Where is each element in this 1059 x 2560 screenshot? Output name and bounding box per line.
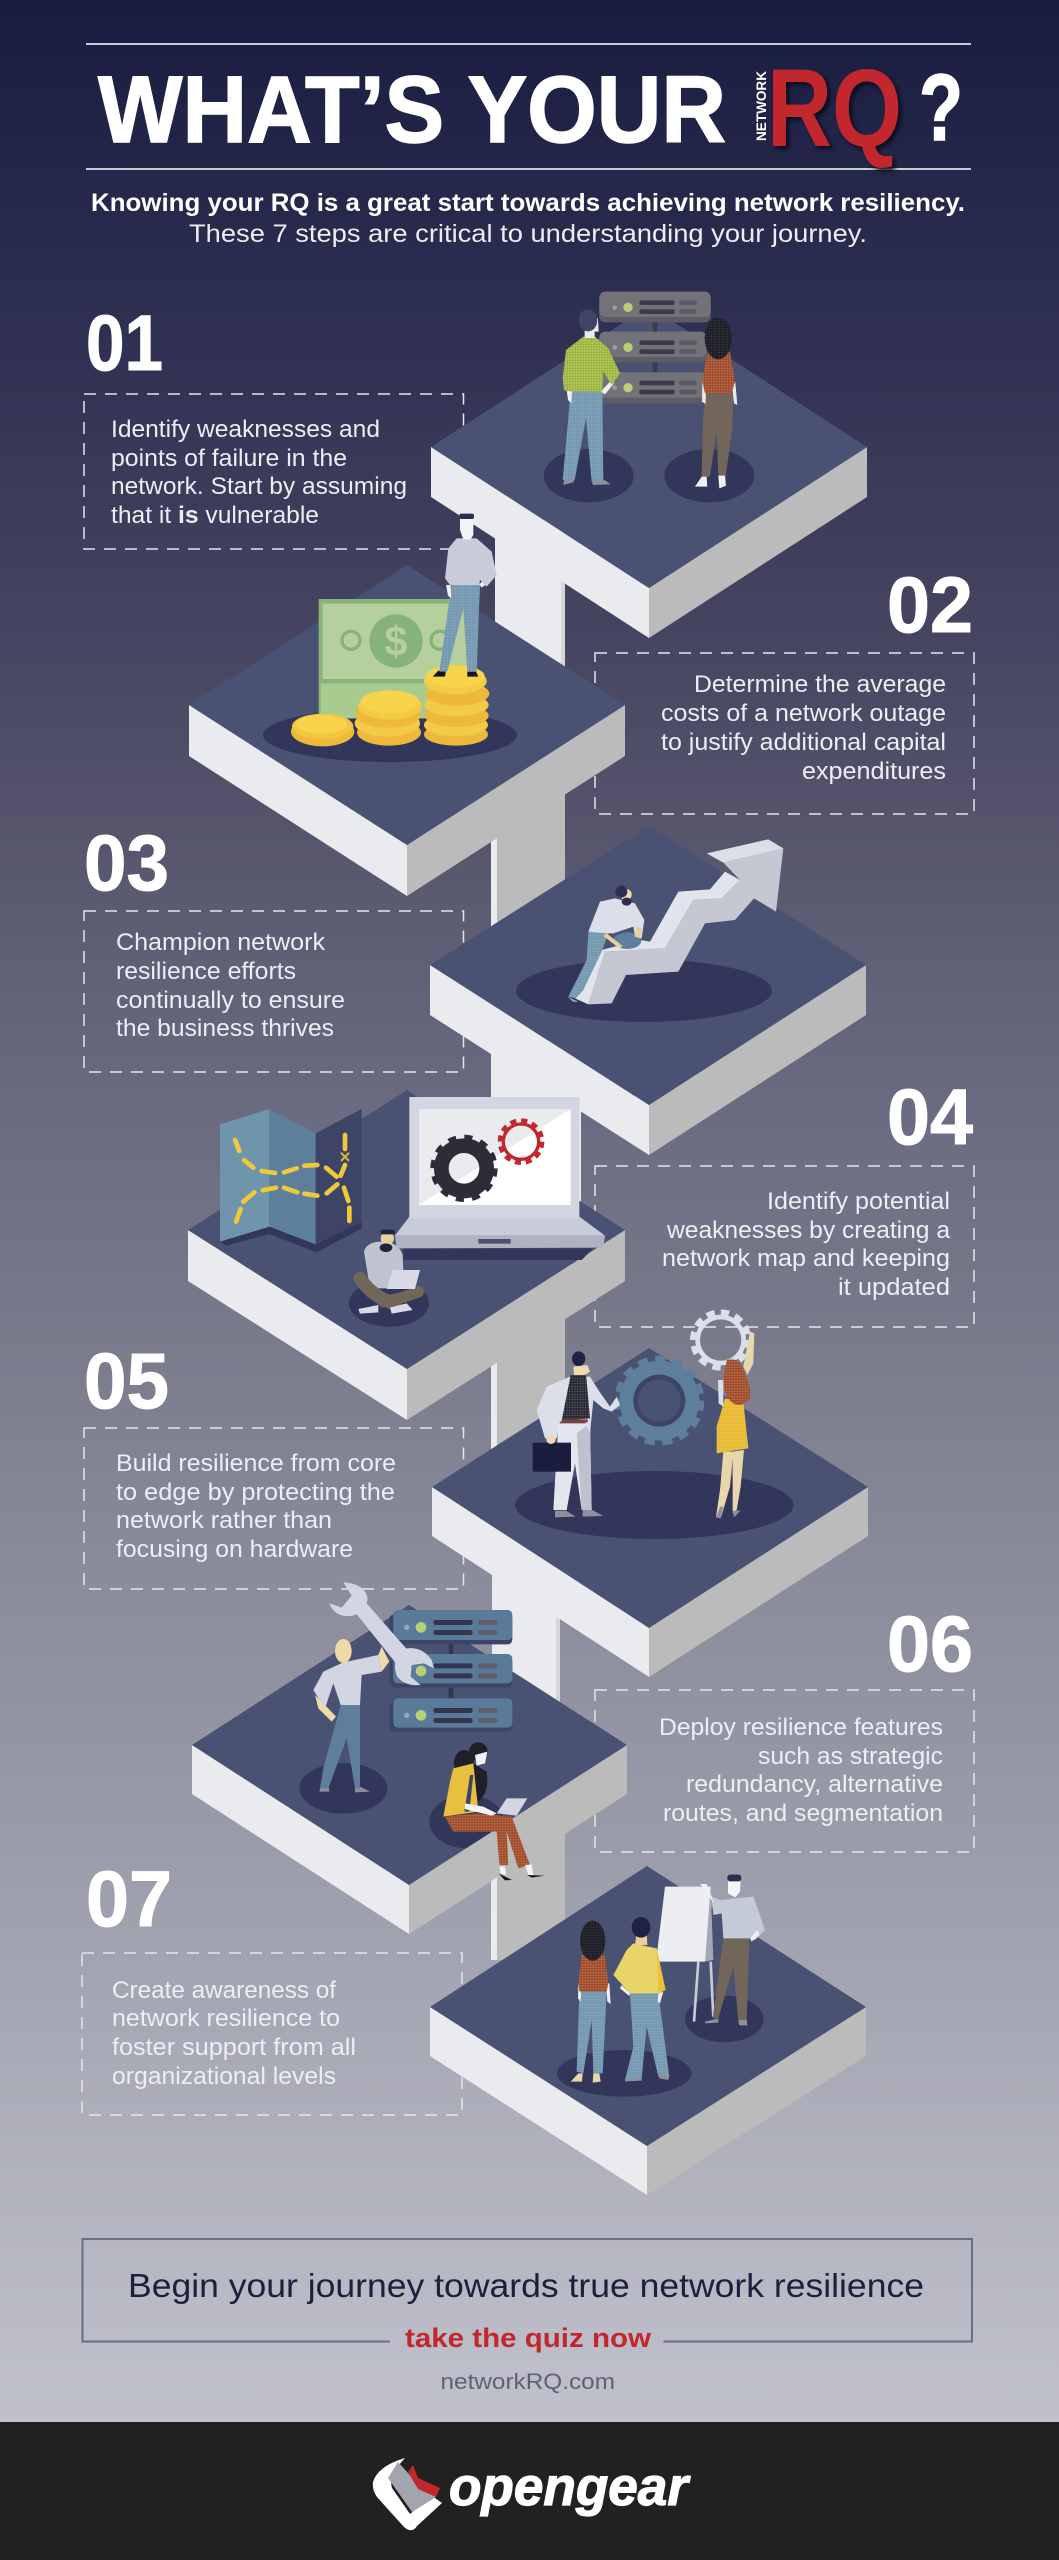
- step 2 text box: expenditures: [802, 758, 946, 785]
- man in green shirt: [563, 309, 620, 485]
- step 5 text box: network rather than: [116, 1507, 332, 1534]
- call to action box: take the quiz now: [405, 2323, 652, 2353]
- icon: banknote: $: [384, 619, 407, 665]
- title block: NETWORK: [753, 71, 769, 141]
- subtitle: Knowing your RQ is a great start towards achieving network resiliency.: [91, 189, 965, 217]
- number 03: 03: [84, 818, 169, 907]
- platform 7: [430, 1866, 866, 2195]
- person sitting with laptop: [349, 1230, 429, 1327]
- step 1 text box: points of failure in the: [111, 445, 347, 472]
- man standing on coins: [433, 514, 497, 677]
- platform 1: [431, 306, 867, 638]
- step 2 text box: Determine the average: [694, 671, 946, 698]
- woman in yellow dress: [716, 1332, 754, 1519]
- step 3 text box: resilience efforts: [116, 958, 296, 985]
- number 05: 05: [84, 1336, 169, 1425]
- logo: opengear: [373, 2457, 691, 2530]
- platform 3: [430, 826, 866, 1155]
- platform 6: [192, 1605, 627, 1934]
- subtitle: [91, 189, 965, 248]
- illustration: step 1 people and servers: [544, 292, 754, 502]
- title block: ?: [919, 55, 963, 161]
- illustration: step 6 wrench, servers and woman: [299, 1582, 545, 1880]
- website link: networkRQ.com: [440, 2369, 615, 2394]
- step 7 text box: organizational levels: [112, 2063, 336, 2090]
- step 2 text box: costs of a network outage: [661, 700, 946, 727]
- icon: server rack: [599, 292, 711, 403]
- step 1 text box: Identify weaknesses and: [111, 416, 380, 443]
- illustration: step 4 map and laptop: [220, 1097, 605, 1327]
- illustration: step 7 presentation: [557, 1875, 765, 2097]
- icon: banknote: [319, 599, 473, 718]
- step 1 text box: [84, 394, 464, 549]
- step 6 text box: such as strategic: [758, 1743, 943, 1770]
- step 5 text box: Build resilience from core: [116, 1450, 396, 1477]
- step 4 text box: it updated: [838, 1274, 950, 1301]
- title block: WHAT’S YOUR: [98, 57, 726, 163]
- icon: folded map: [220, 1109, 362, 1252]
- step 5 text box: to edge by protecting the: [116, 1479, 395, 1506]
- number 04: 04: [887, 1072, 973, 1161]
- step 4 text box: Identify potential: [767, 1188, 950, 1215]
- icon: blue server rack: [389, 1610, 512, 1732]
- number 06: 06: [887, 1599, 973, 1688]
- illustration: step 5 team with gears: [515, 1313, 794, 1539]
- step 7 text box: network resilience to: [112, 2005, 340, 2032]
- illustration: step 2 money and coins: [263, 514, 517, 762]
- man holding wrench: [313, 1639, 389, 1792]
- icon: gold coins: [291, 665, 489, 746]
- number 01: 01: [86, 298, 163, 387]
- step 3 text box: Champion network: [116, 929, 326, 956]
- platform 4: [188, 1090, 625, 1420]
- number 02: 02: [887, 560, 973, 649]
- title block: [86, 43, 971, 170]
- step 4 text box: [595, 1166, 974, 1327]
- businessman with briefcase: [533, 1351, 620, 1517]
- step 6 text box: redundancy, alternative: [686, 1771, 943, 1798]
- platform 2: [189, 565, 625, 896]
- icon: white gear: [694, 1313, 747, 1367]
- step 6 text box: Deploy resilience features: [659, 1714, 943, 1741]
- presenter: [700, 1875, 765, 2025]
- call to action box: [82, 2239, 972, 2353]
- title block: RQ: [767, 47, 902, 170]
- step 5 text box: [84, 1428, 464, 1589]
- step 7 text box: [82, 1953, 462, 2115]
- icon: flipchart: [656, 1887, 713, 2022]
- woman from behind: [571, 1921, 611, 2083]
- step 7 text box: foster support from all: [112, 2034, 356, 2061]
- illustration: step 3 climbing arrow: [516, 839, 783, 1022]
- step 3 text box: [84, 911, 464, 1072]
- icon: rising arrow: [575, 839, 783, 1004]
- step 1 text box: network. Start by assuming: [111, 473, 407, 500]
- step 5 text box: focusing on hardware: [116, 1536, 353, 1563]
- man climbing: [567, 886, 644, 1002]
- call to action box: Begin your journey towards true network resilience: [128, 2267, 924, 2304]
- step 4 text box: network map and keeping: [662, 1245, 950, 1272]
- icon: large blue gear: [618, 1359, 701, 1442]
- connecting columns: [491, 520, 581, 1960]
- woman with dark hair: [695, 317, 737, 488]
- icon: laptop with gears: [395, 1097, 605, 1260]
- step 6 text box: [595, 1690, 974, 1852]
- footer band: [0, 2422, 1059, 2560]
- woman sitting with laptop: [443, 1742, 545, 1880]
- step 6 text box: routes, and segmentation: [663, 1800, 943, 1827]
- step 2 text box: to justify additional capital: [661, 729, 946, 756]
- step 3 text box: continually to ensure: [116, 987, 345, 1014]
- number 07: 07: [86, 1854, 172, 1943]
- step 1 text box: that it is vulnerable: [111, 502, 319, 529]
- step 2 text box: [595, 653, 974, 814]
- step 4 text box: weaknesses by creating a: [666, 1217, 951, 1244]
- logo: opengear: opengear: [449, 2457, 691, 2517]
- platform 5: [432, 1348, 868, 1677]
- icon: wrench: [329, 1582, 434, 1685]
- step 3 text box: the business thrives: [116, 1015, 334, 1042]
- subtitle: These 7 steps are critical to understanding your journey.: [189, 220, 867, 248]
- man in yellow shirt: [613, 1917, 669, 2081]
- step 7 text box: Create awareness of: [112, 1977, 336, 2004]
